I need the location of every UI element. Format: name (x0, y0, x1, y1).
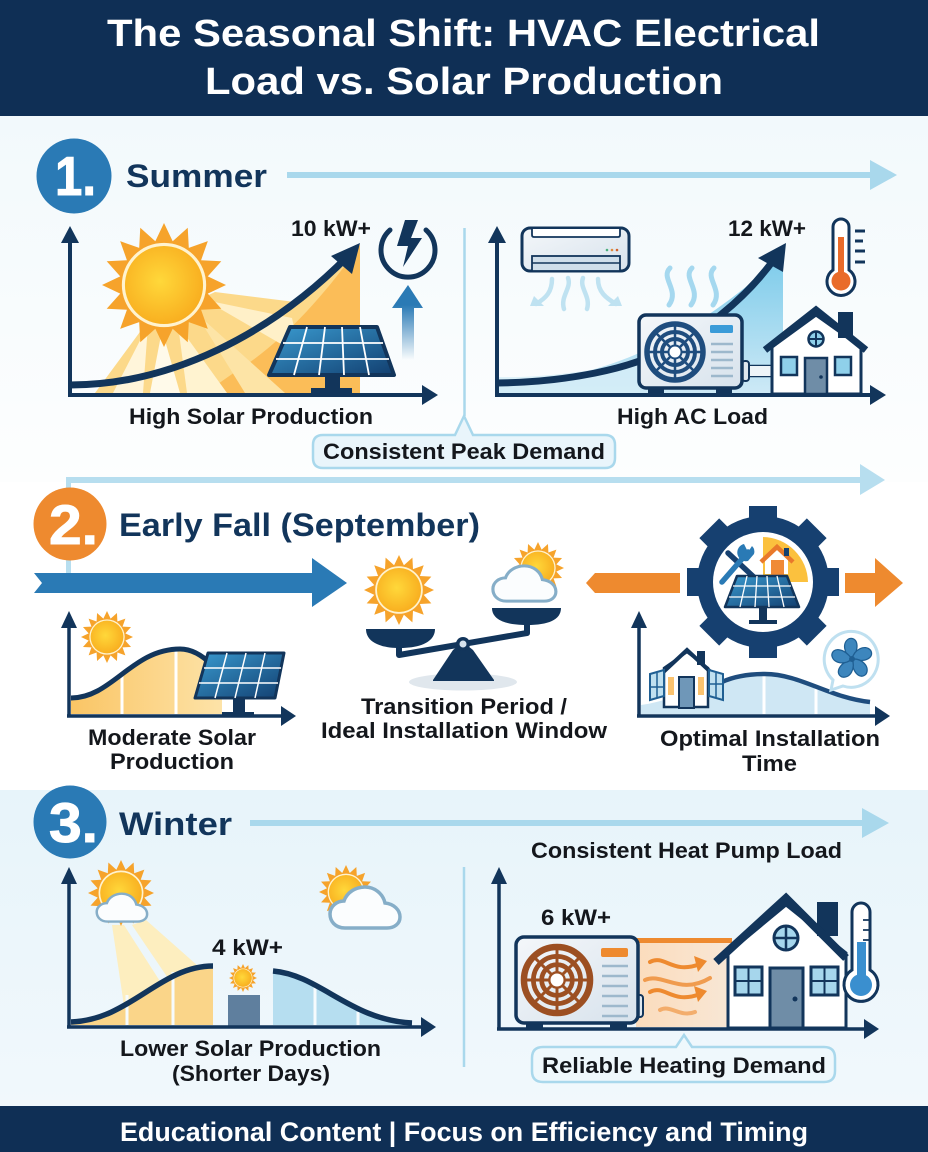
production area (71, 649, 222, 714)
icon: sun (102, 223, 226, 347)
panel: winter (34, 786, 889, 1086)
axes (61, 611, 296, 726)
callout: reliable heating demand: Reliable Heating Demand (542, 1053, 826, 1078)
icon: heat pump unit (516, 937, 643, 1028)
icon: solar panel (195, 653, 284, 716)
footer banner: Educational Content | Focus on Efficiency and Timing (120, 1117, 808, 1147)
arrow: upward blue (392, 285, 423, 360)
label: high solar production: High Solar Production (129, 404, 373, 429)
icon: cold thermometer (844, 903, 878, 1001)
icon: open house (650, 650, 723, 708)
badge: number 2 (34, 488, 106, 560)
shoulder season area (641, 674, 870, 714)
footer banner (0, 1106, 928, 1152)
label: high AC load: High AC Load (617, 404, 768, 429)
badge: number 1: 1. (55, 145, 96, 207)
icon: solar panel (269, 327, 394, 395)
icon: hot thermometer (827, 219, 865, 295)
arrow: blue timeline (34, 558, 347, 607)
divider (463, 867, 465, 1067)
icon: sun and cloud right (319, 865, 400, 928)
panel: summer (36, 138, 897, 468)
crossed tools (722, 544, 757, 582)
production curve arrow (70, 243, 360, 385)
load area (497, 255, 783, 393)
badge: number 1 (36, 138, 112, 214)
panel: early fall (34, 464, 903, 776)
icon: sun and cloud (88, 860, 154, 926)
label: lower solar production (120, 1036, 381, 1086)
callout: reliable heating demand (532, 1035, 835, 1082)
solar panel in gear (725, 576, 799, 624)
chart: moderate solar production (61, 611, 296, 774)
heading: Summer: Summer (126, 158, 267, 194)
arrow: winter timeline (250, 808, 889, 838)
label: transition period (321, 694, 608, 743)
arrow: summer timeline (287, 160, 897, 190)
label: moderate solar production: Moderate Solar (88, 725, 256, 750)
badge: number 3 (34, 786, 106, 858)
icon: fan bubble (824, 631, 878, 690)
production area (71, 966, 412, 1025)
title banner (0, 0, 928, 116)
icon: balance scale (364, 542, 564, 690)
icon: sun (81, 611, 133, 663)
value: 12 kW+: 12 kW+ (728, 216, 806, 241)
production curve (71, 966, 412, 1023)
title banner: Load vs. Solar Production (205, 61, 723, 103)
icon: heat waves (667, 268, 716, 305)
heading: early fall: Early Fall (September) (119, 507, 480, 543)
icon: cold air flow (530, 278, 622, 309)
badge: number 3: 3. (49, 791, 98, 854)
value: 10 kW+: 10 kW+ (291, 216, 371, 241)
icon: indoor AC unit (522, 228, 629, 271)
label: optimal installation time: Optimal Installation (660, 726, 880, 751)
heat band (636, 938, 732, 1027)
value: 4 kW+: 4 kW+ (212, 935, 283, 960)
yellow gauge (763, 537, 808, 582)
arrow: orange head (845, 558, 903, 607)
chart: high AC load (488, 216, 886, 429)
icon: outdoor AC unit (639, 315, 775, 394)
label: lower solar production: Lower Solar Production (120, 1036, 381, 1061)
divider and callout: consistent peak demand: Consistent Peak Demand (323, 439, 605, 464)
icon: house (716, 898, 846, 1028)
arrow: orange timeline (586, 573, 680, 593)
small house (761, 547, 793, 577)
axes (61, 226, 438, 405)
icon: house (765, 310, 866, 394)
badge: number 2: 2. (49, 493, 98, 556)
chart: heat pump load (491, 867, 879, 1082)
chart: lower solar production (61, 860, 436, 1086)
axes (491, 867, 879, 1039)
icon: power bolt (381, 220, 435, 277)
sun on scale (364, 555, 434, 625)
sunlight and output area (95, 245, 360, 393)
title banner: The Seasonal Shift: HVAC Electrical (107, 13, 820, 55)
label: consistent heat pump load: Consistent Heat Pump Load (531, 838, 842, 863)
axes (631, 611, 890, 726)
label: transition period: Transition Period / (361, 694, 567, 719)
label: optimal installation time (660, 726, 880, 776)
axes (488, 226, 886, 405)
value: 6 kW+: 6 kW+ (541, 905, 611, 930)
divider and callout: consistent peak demand (313, 228, 615, 468)
label: lower solar production: (Shorter Days) (172, 1061, 330, 1086)
label: moderate solar production: Production (110, 749, 234, 774)
sun behind cloud on scale (493, 542, 564, 601)
load curve arrow (497, 243, 786, 383)
chart: high solar production (61, 216, 438, 429)
chart: optimal installation time (631, 611, 890, 776)
heading: winter: Winter (119, 806, 232, 842)
weak sun rays (112, 920, 198, 1026)
midpoint gap (228, 964, 260, 1026)
arrow: connector from summer (66, 464, 885, 574)
icon: installation gear (687, 506, 839, 658)
label: optimal installation time: Time (742, 751, 797, 776)
label: transition period: Ideal Installation Window (321, 718, 608, 743)
axes (61, 867, 436, 1037)
label: moderate solar production (88, 725, 256, 774)
icon: warm air arrows (645, 956, 710, 1014)
